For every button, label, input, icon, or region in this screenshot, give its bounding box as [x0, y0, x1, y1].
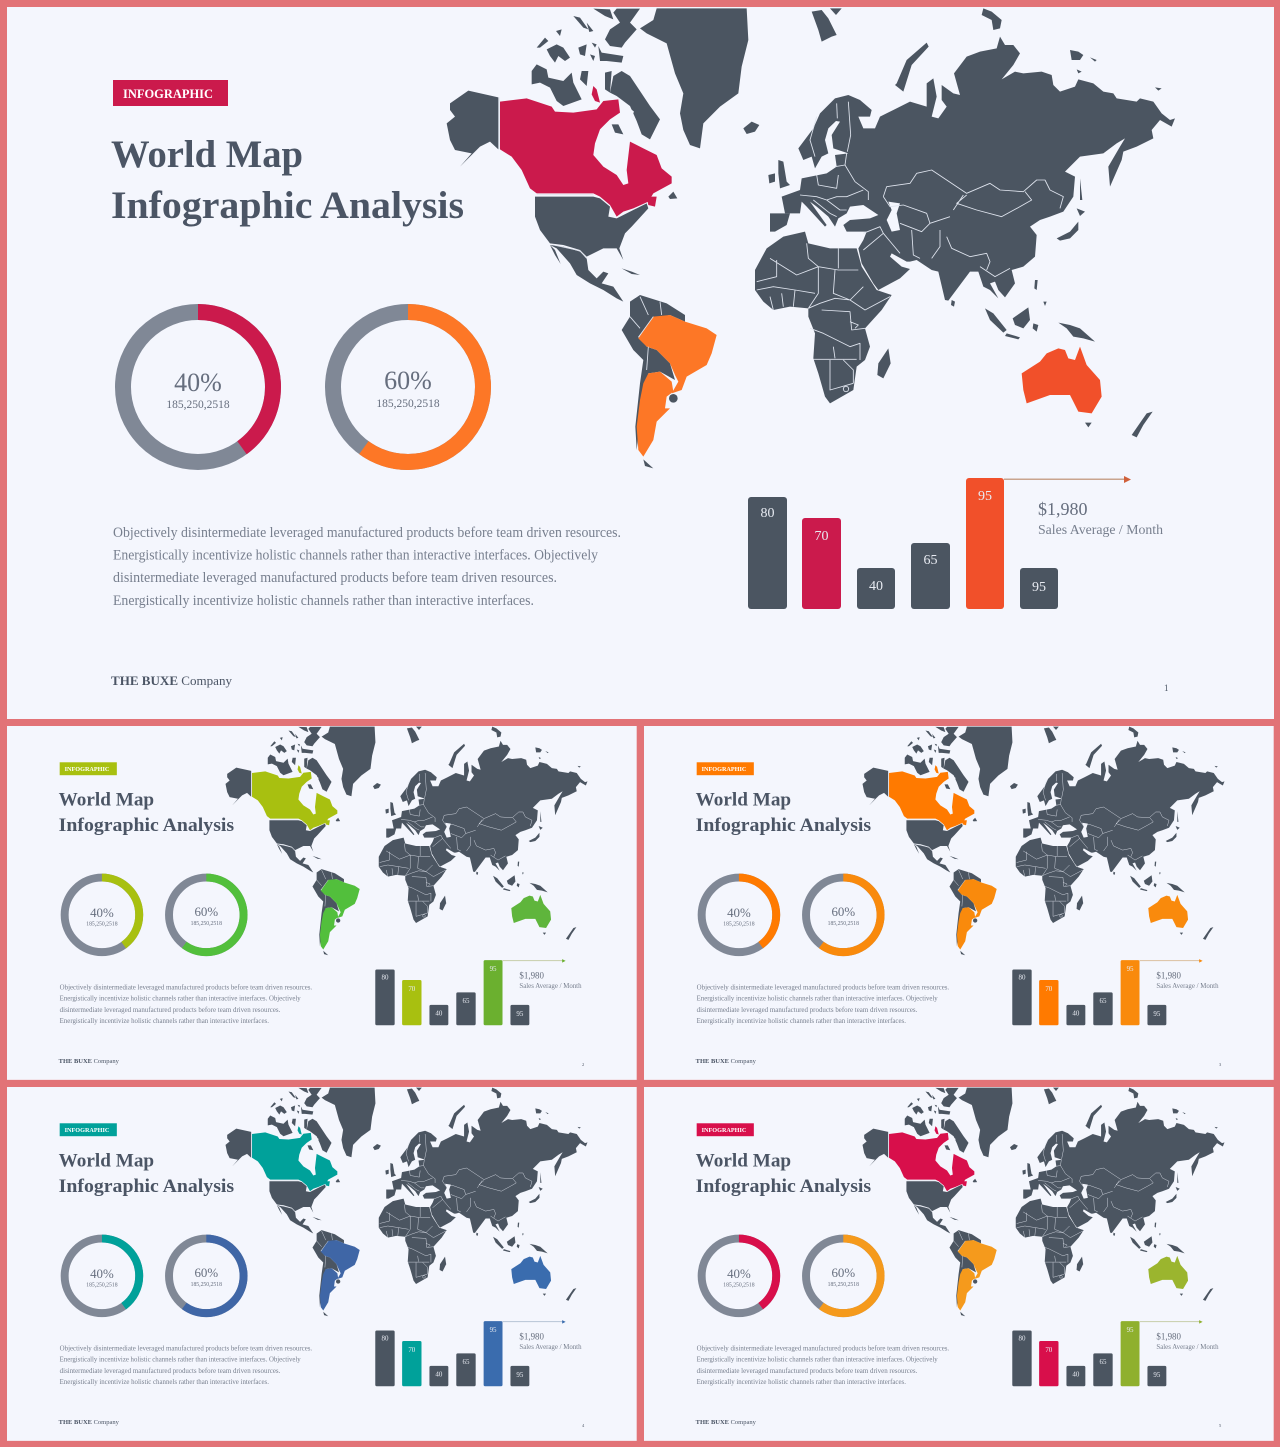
- donut chart 40%: 185,250,2518: [86, 1282, 118, 1288]
- footer brand: THE BUXE Company: [59, 1419, 120, 1426]
- badge: INFOGRAPHIC: [65, 766, 110, 773]
- bar chart: 95: [1153, 1010, 1161, 1018]
- bar chart: [748, 478, 1058, 609]
- page number: 1: [1164, 683, 1168, 693]
- panel: main slide: [7, 7, 1274, 719]
- world map: [863, 727, 1224, 955]
- sales callout: [1156, 1331, 1219, 1351]
- slide background: [644, 726, 1274, 1080]
- title: World Map: [59, 790, 154, 811]
- body text: [60, 1344, 312, 1386]
- donut chart 60%: 185,250,2518: [828, 921, 859, 927]
- world map: [226, 727, 587, 955]
- body text: Energistically incentivize holistic channels rather than interactive interfaces.: [60, 1378, 269, 1386]
- badge: [60, 762, 117, 775]
- sales callout: $1,980: [519, 970, 545, 980]
- sales callout: [1156, 970, 1219, 990]
- bar chart: 70: [1045, 1346, 1053, 1354]
- title: World Map: [696, 790, 791, 811]
- title: Infographic Analysis: [59, 815, 235, 836]
- donut chart 60%: 185,250,2518: [376, 398, 440, 410]
- panel: slide 4 teal: [7, 1087, 637, 1441]
- sales callout: $1,980: [1156, 970, 1182, 980]
- bar chart: 80: [760, 506, 774, 521]
- title: Infographic Analysis: [696, 815, 872, 836]
- panel: slide 2 green: [7, 726, 637, 1080]
- badge: [113, 80, 228, 106]
- body text: Energistically incentivize holistic channels rather than interactive interfaces.: [113, 593, 534, 609]
- title: [696, 1151, 872, 1197]
- donut chart 60%: 60%: [194, 904, 218, 919]
- donut chart 40%: [123, 312, 273, 462]
- body text: Energistically incentivize holistic channels rather than interactive interfaces.: [697, 1017, 906, 1025]
- body text: Energistically incentivize holistic channels rather than interactive interfaces. Objectively: [697, 995, 938, 1003]
- slide background: [7, 1087, 637, 1441]
- arrow: [1140, 1320, 1203, 1324]
- panel: slide 5 crimson: [644, 1087, 1274, 1441]
- bar chart: 70: [814, 529, 828, 544]
- sales callout: [519, 1331, 582, 1351]
- bar chart: 65: [1100, 997, 1107, 1005]
- title: Infographic Analysis: [111, 184, 464, 227]
- sales callout: Sales Average / Month: [1156, 982, 1219, 990]
- body text: Objectively disintermediate leveraged manufactured products before team driven resources.: [60, 983, 312, 991]
- body text: Energistically incentivize holistic channels rather than interactive interfaces. Objectively: [60, 995, 301, 1003]
- donut chart 60%: 60%: [194, 1265, 218, 1280]
- world map: [863, 1088, 1224, 1316]
- title: [59, 1151, 235, 1197]
- page number: 4: [582, 1423, 585, 1428]
- bar chart: 40: [1072, 1371, 1080, 1379]
- donut chart 40%: [702, 878, 776, 952]
- sales callout: [519, 970, 582, 990]
- bar chart: 95: [978, 489, 992, 504]
- world map: [447, 8, 1175, 468]
- title: Infographic Analysis: [59, 1176, 235, 1197]
- title: World Map: [59, 1151, 154, 1172]
- sales callout: [1038, 499, 1163, 538]
- bar chart: 40: [1072, 1010, 1080, 1018]
- bar chart: 95: [1127, 965, 1134, 973]
- slide background: [644, 1087, 1274, 1441]
- arrow: [503, 1320, 566, 1324]
- footer brand: THE BUXE Company: [59, 1058, 120, 1065]
- bar chart: 95: [516, 1371, 524, 1379]
- sales callout: Sales Average / Month: [1038, 523, 1163, 538]
- arrow: [1004, 476, 1131, 483]
- slide background: [7, 7, 1274, 719]
- badge: INFOGRAPHIC: [65, 1127, 110, 1134]
- footer brand: THE BUXE Company: [696, 1058, 757, 1065]
- footer brand: THE BUXE Company: [696, 1419, 757, 1426]
- slide background: [7, 726, 637, 1080]
- title: [696, 790, 872, 836]
- badge: INFOGRAPHIC: [702, 766, 747, 773]
- bar chart: 80: [381, 1334, 389, 1342]
- body text: Objectively disintermediate leveraged manufactured products before team driven resources.: [697, 1344, 949, 1352]
- bar chart: 80: [1018, 973, 1026, 981]
- bar chart: 95: [490, 965, 497, 973]
- bar chart: 40: [435, 1010, 443, 1018]
- body text: Objectively disintermediate leveraged manufactured products before team driven resources.: [113, 525, 621, 541]
- body text: Energistically incentivize holistic channels rather than interactive interfaces. Objectively: [697, 1356, 938, 1364]
- donut chart 40%: [65, 1239, 139, 1313]
- bar chart: 65: [463, 1358, 470, 1366]
- bar chart: 95: [516, 1010, 524, 1018]
- donut chart 60%: 185,250,2518: [828, 1282, 859, 1288]
- donut chart 40%: 40%: [90, 905, 114, 920]
- title: World Map: [696, 1151, 791, 1172]
- bar chart: 65: [924, 553, 938, 568]
- body text: Energistically incentivize holistic channels rather than interactive interfaces.: [60, 1017, 269, 1025]
- bar chart: [1012, 1321, 1166, 1386]
- body text: [113, 525, 621, 609]
- donut chart 60%: [169, 1239, 244, 1313]
- donut chart 60%: 60%: [384, 366, 432, 395]
- page number: 2: [582, 1062, 584, 1067]
- bar chart: 40: [435, 1371, 443, 1379]
- body text: Energistically incentivize holistic channels rather than interactive interfaces. Objectively: [60, 1356, 301, 1364]
- body text: Objectively disintermediate leveraged manufactured products before team driven resources.: [697, 983, 949, 991]
- sales callout: $1,980: [1038, 499, 1088, 519]
- donut chart 60%: 185,250,2518: [191, 921, 222, 927]
- donut chart 40%: 185,250,2518: [86, 921, 118, 927]
- body text: Energistically incentivize holistic channels rather than interactive interfaces.: [697, 1378, 906, 1386]
- badge: [697, 1123, 754, 1136]
- donut chart 40%: 185,250,2518: [166, 399, 230, 411]
- title: World Map: [111, 133, 303, 176]
- bar chart: [375, 960, 529, 1025]
- donut chart 60%: [333, 312, 483, 462]
- bar chart: 65: [463, 997, 470, 1005]
- donut chart 40%: 185,250,2518: [723, 1282, 755, 1288]
- page number: 5: [1219, 1423, 1222, 1428]
- donut chart 40%: 40%: [727, 1266, 751, 1281]
- bar chart: 95: [490, 1326, 497, 1334]
- badge: INFOGRAPHIC: [123, 86, 213, 101]
- panel: slide 3 orange: [644, 726, 1274, 1080]
- world map: [226, 1088, 587, 1316]
- badge: [697, 762, 754, 775]
- donut chart 40%: [702, 1239, 776, 1313]
- sales callout: $1,980: [519, 1331, 545, 1341]
- body text: disintermediate leveraged manufactured products before team driven resources.: [697, 1006, 918, 1014]
- donut chart 60%: 185,250,2518: [191, 1282, 222, 1288]
- bar chart: 95: [1127, 1326, 1134, 1334]
- donut chart 60%: [169, 878, 244, 952]
- body text: disintermediate leveraged manufactured products before team driven resources.: [60, 1367, 281, 1375]
- footer brand: THE BUXE Company: [111, 673, 232, 688]
- title: [111, 133, 464, 227]
- title: [59, 790, 235, 836]
- page number: 3: [1219, 1062, 1222, 1067]
- sales callout: Sales Average / Month: [519, 1343, 582, 1351]
- badge: [60, 1123, 117, 1136]
- donut chart 40%: 40%: [90, 1266, 114, 1281]
- arrow: [503, 959, 566, 963]
- bar chart: 95: [1032, 580, 1046, 595]
- bar chart: [1012, 960, 1166, 1025]
- body text: [697, 1344, 949, 1386]
- body text: disintermediate leveraged manufactured products before team driven resources.: [113, 570, 557, 586]
- sales callout: Sales Average / Month: [1156, 1343, 1219, 1351]
- donut chart 60%: [806, 878, 881, 952]
- donut chart 60%: [806, 1239, 881, 1313]
- badge: INFOGRAPHIC: [702, 1127, 747, 1134]
- arrow: [1140, 959, 1203, 963]
- bar chart: 65: [1100, 1358, 1107, 1366]
- bar chart: 70: [408, 1346, 416, 1354]
- body text: disintermediate leveraged manufactured products before team driven resources.: [697, 1367, 918, 1375]
- donut chart 40%: 185,250,2518: [723, 921, 755, 927]
- bar chart: [375, 1321, 529, 1386]
- donut chart 40%: 40%: [174, 368, 222, 397]
- donut chart 60%: 60%: [831, 1265, 855, 1280]
- sales callout: $1,980: [1156, 1331, 1182, 1341]
- body text: [60, 983, 312, 1025]
- bar chart: 40: [869, 579, 883, 594]
- body text: Objectively disintermediate leveraged manufactured products before team driven resources.: [60, 1344, 312, 1352]
- body text: [697, 983, 949, 1025]
- bar chart: 95: [1153, 1371, 1161, 1379]
- bar chart: 70: [408, 985, 416, 993]
- body text: disintermediate leveraged manufactured products before team driven resources.: [60, 1006, 281, 1014]
- bar chart: 70: [1045, 985, 1053, 993]
- donut chart 40%: 40%: [727, 905, 751, 920]
- bar chart: 80: [1018, 1334, 1026, 1342]
- body text: Energistically incentivize holistic channels rather than interactive interfaces. Objectively: [113, 548, 599, 564]
- donut chart 40%: [65, 878, 139, 952]
- bar chart: 80: [381, 973, 389, 981]
- title: Infographic Analysis: [696, 1176, 872, 1197]
- sales callout: Sales Average / Month: [519, 982, 582, 990]
- donut chart 60%: 60%: [831, 904, 855, 919]
